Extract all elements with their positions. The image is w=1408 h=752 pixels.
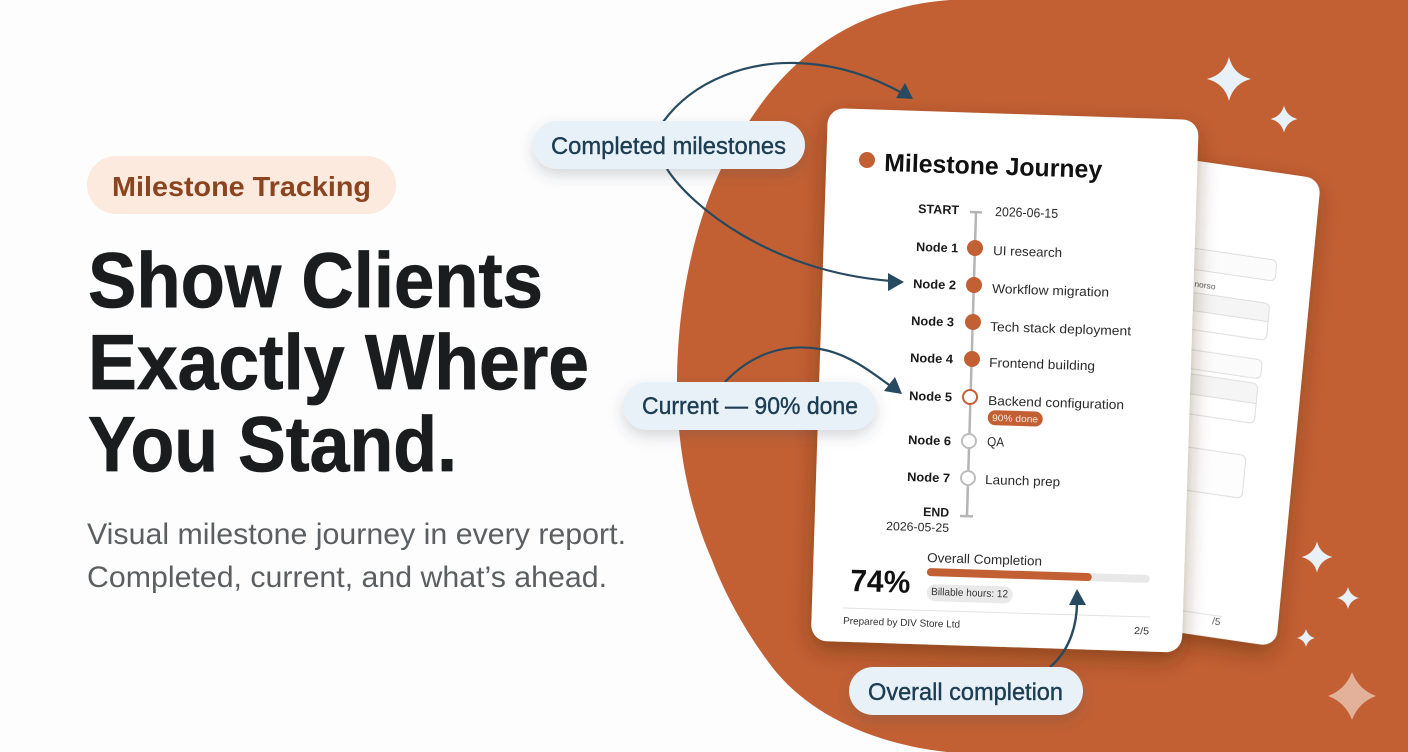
timeline labels: END (923, 505, 949, 520)
timeline descriptions: Launch prep (985, 472, 1060, 489)
subtitle (87, 518, 626, 594)
card footer: 2/5 (1134, 626, 1150, 637)
completion summary: 74% (850, 563, 911, 600)
back report page: /5 (1212, 616, 1221, 628)
timeline labels: Node 5 (909, 389, 952, 404)
back report page (910, 125, 1321, 647)
timeline descriptions: UI research (993, 243, 1062, 260)
completion summary (850, 550, 1150, 604)
arrow: completed milestones to top of card (663, 63, 913, 122)
arrow: current to node 5 (725, 347, 902, 394)
timeline descriptions: 2026-06-15 (995, 204, 1058, 221)
timeline (960, 212, 983, 516)
card footer: Prepared by DIV Store Ltd (843, 616, 960, 631)
timeline labels: Node 7 (907, 470, 950, 485)
badge: Milestone Tracking (87, 156, 396, 214)
timeline descriptions: QA (987, 434, 1005, 450)
timeline descriptions: Backend configuration (988, 393, 1124, 412)
callout: current 90% done: Current — 90% done (642, 393, 858, 420)
back report page: norso (1194, 279, 1216, 292)
badge: Milestone Tracking: Milestone Tracking (112, 171, 371, 202)
card heading: Milestone Journey (884, 149, 1103, 184)
callout: completed milestones: Completed milestones (551, 133, 786, 160)
90% done tag (988, 410, 1043, 427)
callout: completed milestones (533, 121, 805, 169)
main report card (811, 108, 1199, 653)
completion summary: Billable hours: 12 (931, 586, 1008, 600)
timeline labels: Node 2 (913, 277, 956, 292)
sparkles (1207, 57, 1376, 720)
card footer (843, 608, 1150, 637)
arrow: overall completion to progress bar (1050, 589, 1086, 667)
headline: Exactly Where (88, 318, 589, 406)
headline (88, 236, 589, 488)
headline: You Stand. (88, 400, 457, 488)
background blob (677, 0, 1408, 752)
timeline descriptions: Frontend building (989, 355, 1095, 373)
callout: overall completion: Overall completion (868, 679, 1063, 706)
subtitle: Visual milestone journey in every report. (87, 518, 626, 551)
timeline labels: Node 6 (908, 433, 951, 448)
timeline labels (907, 202, 960, 520)
callout: current 90% done (623, 382, 876, 430)
90% done tag: 90% done (992, 413, 1038, 425)
timeline descriptions: 2026-05-25 (886, 519, 950, 535)
arrow: completed milestones to node 2 (667, 169, 904, 291)
headline: Show Clients (88, 236, 543, 324)
completion summary: Overall Completion (927, 550, 1042, 569)
timeline descriptions: Tech stack deployment (990, 319, 1132, 338)
timeline descriptions (886, 204, 1132, 535)
subtitle: Completed, current, and what’s ahead. (87, 561, 607, 594)
timeline labels: Node 3 (911, 314, 954, 329)
timeline labels: Node 1 (916, 240, 958, 255)
timeline descriptions: Workflow migration (992, 281, 1109, 300)
card surface (811, 108, 1199, 653)
timeline labels: Node 4 (910, 351, 953, 366)
callout: overall completion (849, 667, 1083, 715)
timeline labels: START (918, 202, 960, 217)
